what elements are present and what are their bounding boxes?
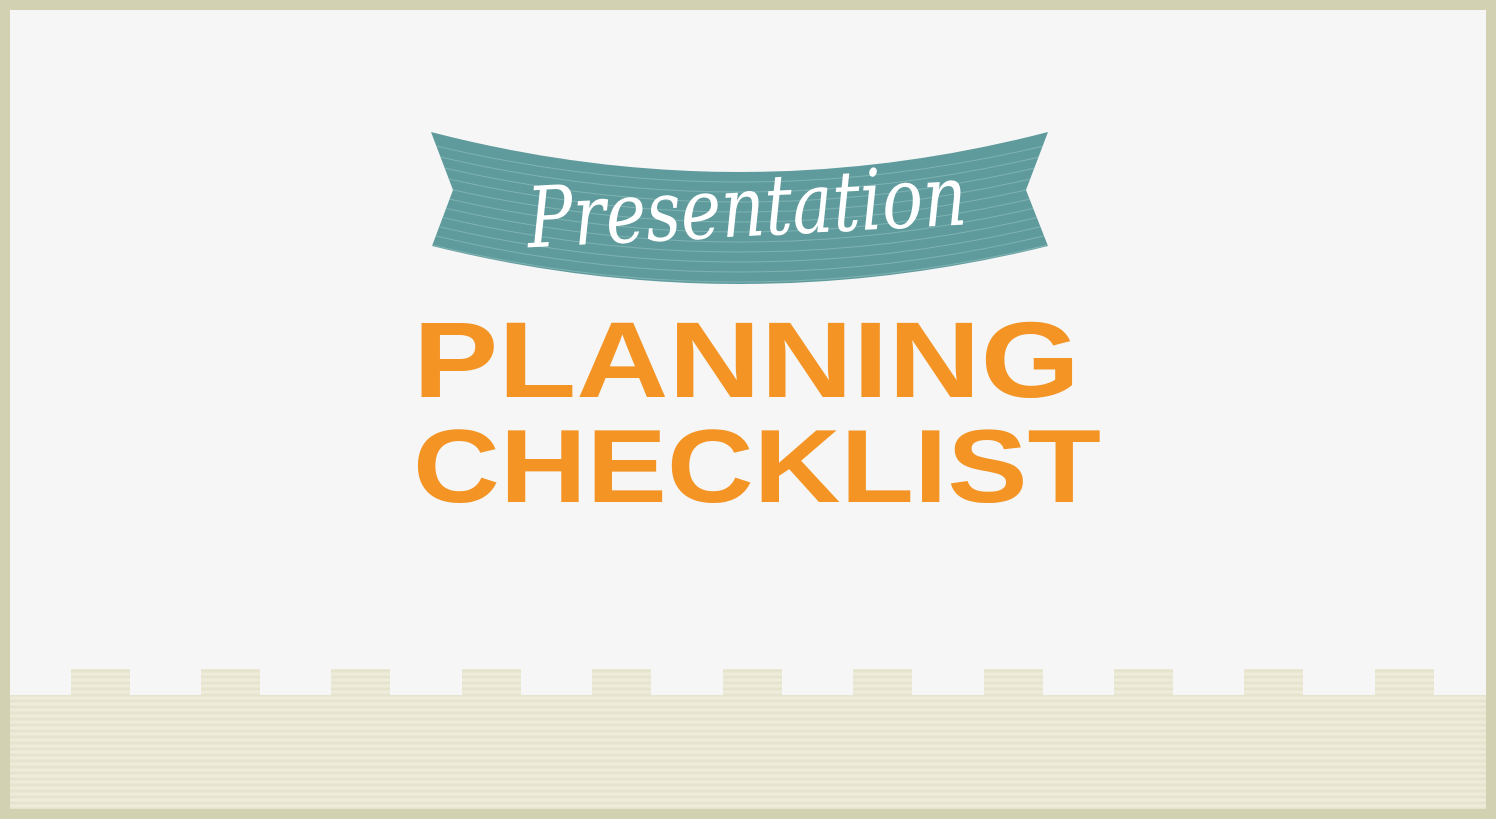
ribbon banner [420,132,1060,284]
bottom crenellated band [10,669,1486,809]
ribbon text: Presentation: Presentation [523,146,969,267]
title line 1: PLANNING [413,299,1080,420]
title line 2: CHECKLIST [413,409,1101,525]
